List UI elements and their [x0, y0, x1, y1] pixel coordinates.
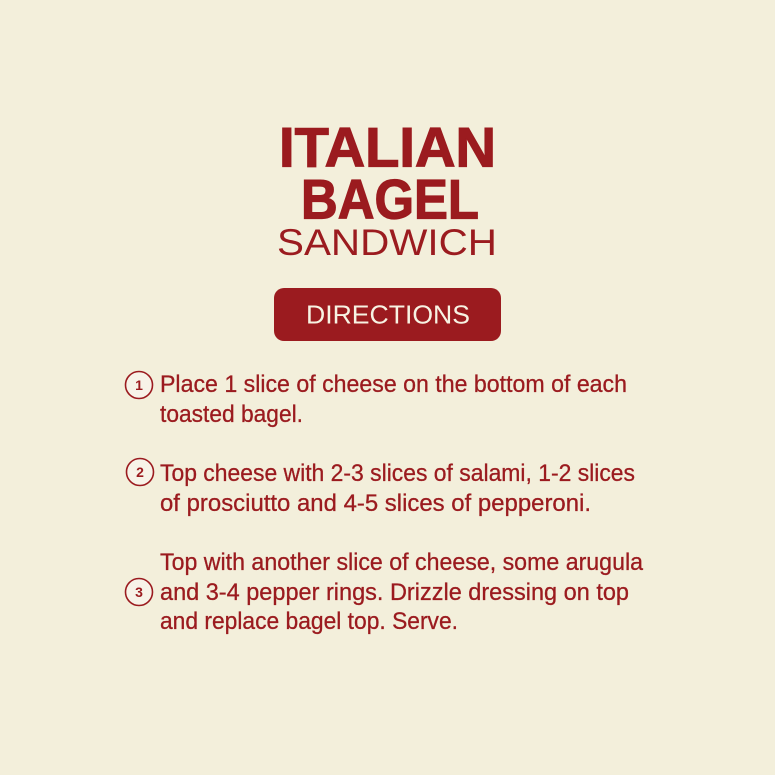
step 2 text: Top cheese with 2-3 slices of salami, 1-2 slices: [160, 460, 635, 487]
icon: number 3: [126, 578, 152, 606]
step 3 text: Top with another slice of cheese, some arugula: [160, 549, 643, 576]
icon: number 3: 3: [135, 584, 143, 600]
title: BAGEL: [301, 168, 479, 230]
step 1: [126, 371, 627, 428]
step 2 text: [160, 460, 635, 517]
step 2: [126, 458, 635, 517]
icon: number 1: 1: [135, 377, 143, 393]
directions badge: DIRECTIONS: [306, 302, 470, 330]
directions badge: [274, 288, 501, 341]
title: SANDWICH: [277, 221, 497, 263]
icon: number 1: [126, 372, 152, 398]
step 3 text: [160, 549, 643, 635]
title: ITALIAN: [279, 116, 496, 178]
step 1 text: toasted bagel.: [160, 401, 303, 428]
step 2 text: of prosciutto and 4-5 slices of pepperoni.: [160, 490, 591, 517]
step 1 text: Place 1 slice of cheese on the bottom of each: [160, 371, 627, 398]
step 1 text: [160, 371, 627, 428]
step 3 text: and 3-4 pepper rings. Drizzle dressing on top: [160, 579, 629, 606]
title: [277, 116, 497, 263]
icon: number 2: 2: [136, 464, 144, 480]
icon: number 2: [126, 458, 154, 486]
step 3 text: and replace bagel top. Serve.: [160, 608, 458, 635]
step 3: [126, 549, 643, 635]
